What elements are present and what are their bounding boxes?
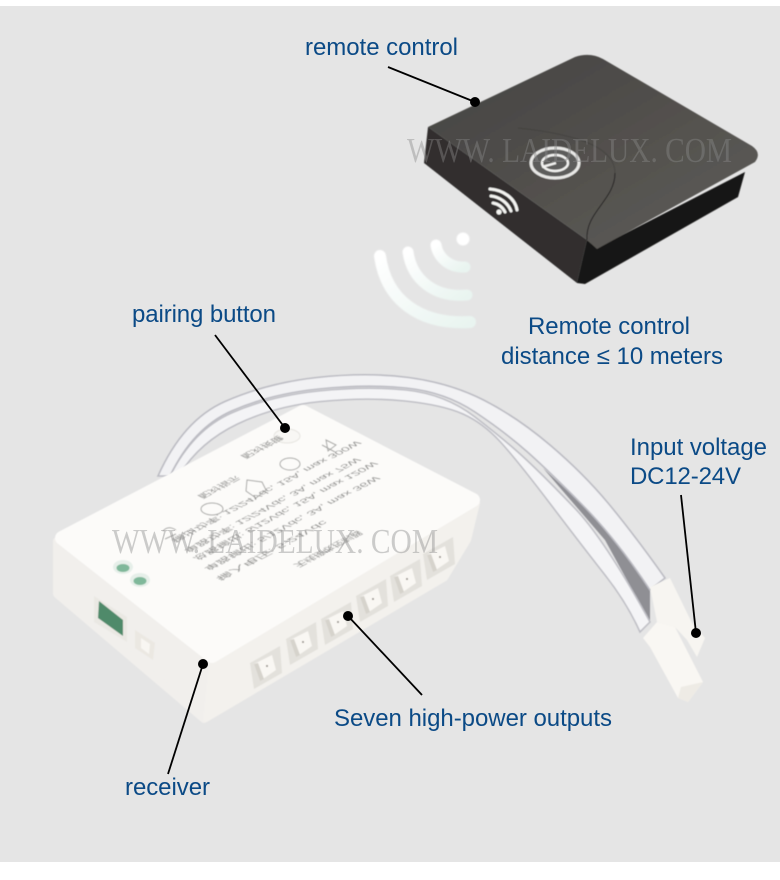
watermark: receiver: WWW. LAIDELUX. COM xyxy=(112,522,438,561)
leader line: input voltage xyxy=(681,495,701,638)
printed specifications: 配对指示 xyxy=(195,474,244,500)
label: remote distance: Remote control xyxy=(528,313,690,340)
connector: upper xyxy=(650,578,705,657)
leader line: remote control xyxy=(388,67,480,107)
receiver device xyxy=(57,412,477,719)
printed specifications: 配对按键 xyxy=(238,434,287,460)
printed specifications: 输出功率: 12/24Vdc, 15A, max 300W xyxy=(168,439,365,544)
cable gap shadow xyxy=(543,468,650,622)
output sockets xyxy=(250,537,455,689)
printed specifications xyxy=(168,434,384,582)
receiver right side face xyxy=(206,503,477,719)
printed specifications: 单路输出: 5/12Vdc, 3A, max 36W xyxy=(201,474,384,572)
leader line: outputs xyxy=(343,611,422,695)
label: pairing button: pairing button xyxy=(132,301,276,328)
green terminal port xyxy=(94,596,127,642)
printed marks xyxy=(163,440,336,539)
label: input voltage xyxy=(630,434,767,490)
pairing button xyxy=(274,429,300,443)
remote curved seam xyxy=(518,128,615,240)
label: input voltage: Input voltage xyxy=(630,434,767,461)
remote right side face xyxy=(577,172,745,284)
printed specifications: 总路输出: 5/12Vdc, 15A, max 120W xyxy=(190,460,382,562)
cables xyxy=(158,375,665,632)
label: outputs: Seven high-power outputs xyxy=(334,705,612,732)
connectors at cable ends xyxy=(643,578,705,702)
cable: lower xyxy=(170,388,650,632)
printed specifications: 输入电压: 5-24Vdc xyxy=(213,519,331,582)
indicator lights xyxy=(113,560,150,587)
icon: large wireless signal xyxy=(380,232,470,322)
printed specifications: 单路功率: 12/24Vdc, 3A, max 75W xyxy=(181,456,365,554)
icon: small wifi on remote xyxy=(490,189,517,215)
receiver top face xyxy=(62,412,473,656)
remote top face xyxy=(428,55,758,249)
cable: upper xyxy=(158,375,665,590)
label: input voltage: DC12-24V xyxy=(630,463,741,490)
leader line: receiver xyxy=(168,659,208,774)
label: receiver: receiver xyxy=(125,774,210,801)
leader line: pairing button xyxy=(215,335,290,433)
label: remote distance xyxy=(501,313,723,370)
icon: power button xyxy=(531,148,579,178)
printed specifications: 无线接收控制器 xyxy=(291,529,366,569)
receiver left side face xyxy=(57,541,212,719)
remote left side face xyxy=(424,127,587,283)
small side socket xyxy=(135,630,155,660)
label: remote control: remote control xyxy=(305,34,458,61)
connector: lower xyxy=(643,622,703,702)
remote control device xyxy=(424,55,758,284)
label: remote distance: distance ≤ 10 meters xyxy=(501,343,723,370)
